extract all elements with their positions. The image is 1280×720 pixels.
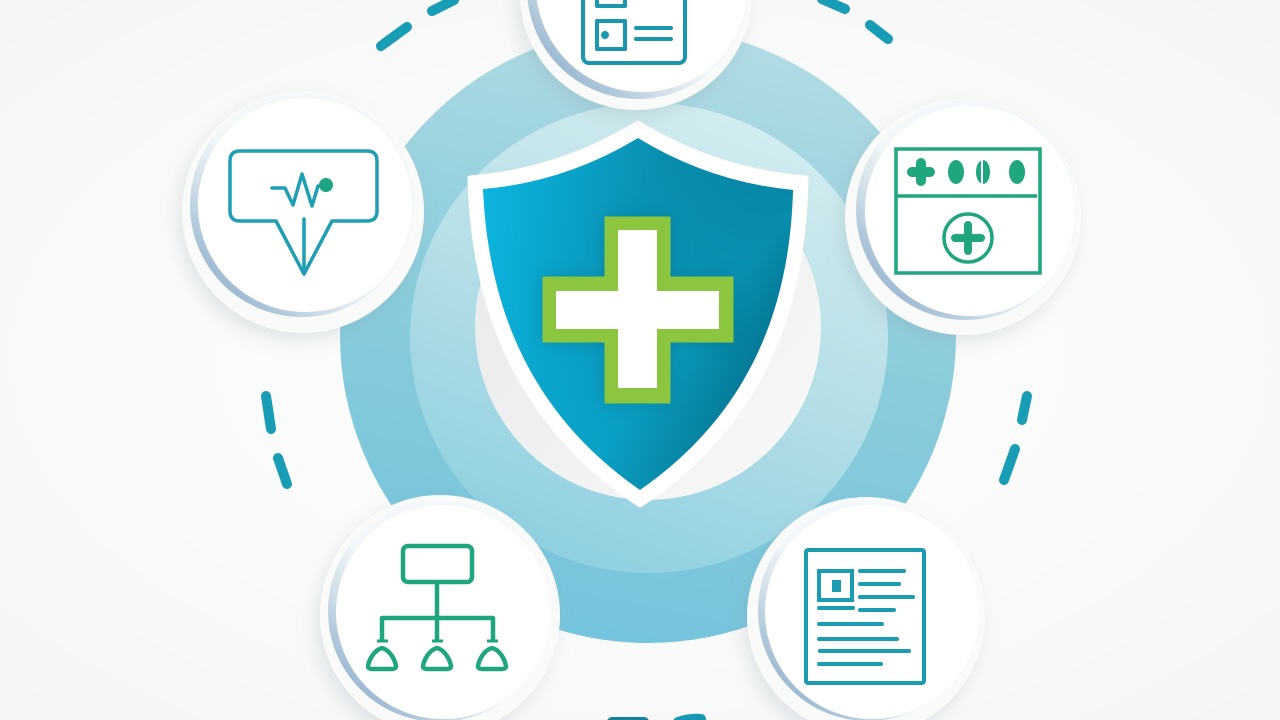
green cross outline <box>543 217 733 403</box>
pale disc behind shield <box>475 154 821 500</box>
icon: medical panel <box>896 149 1040 273</box>
shield white border <box>470 123 806 505</box>
badge: bottom-left hierarchy <box>320 495 560 720</box>
dashed orbit arcs <box>266 0 1027 720</box>
shield blue face <box>483 138 793 490</box>
shield <box>470 123 806 505</box>
icon: clipboard <box>583 0 685 63</box>
icon: document <box>806 550 924 683</box>
badge: right medical panel <box>845 99 1081 335</box>
badge: left heartbeat bubble <box>182 91 424 333</box>
badge: top clipboard <box>520 0 752 110</box>
icon: hierarchy chart <box>368 546 506 669</box>
inner ring <box>410 103 888 573</box>
icon: speech bubble with pulse <box>230 151 377 274</box>
cross shadow <box>543 217 733 403</box>
white cross <box>556 230 719 388</box>
shield lower glow <box>483 138 793 490</box>
outer ring <box>340 27 956 643</box>
badge: bottom-right document <box>747 497 985 720</box>
